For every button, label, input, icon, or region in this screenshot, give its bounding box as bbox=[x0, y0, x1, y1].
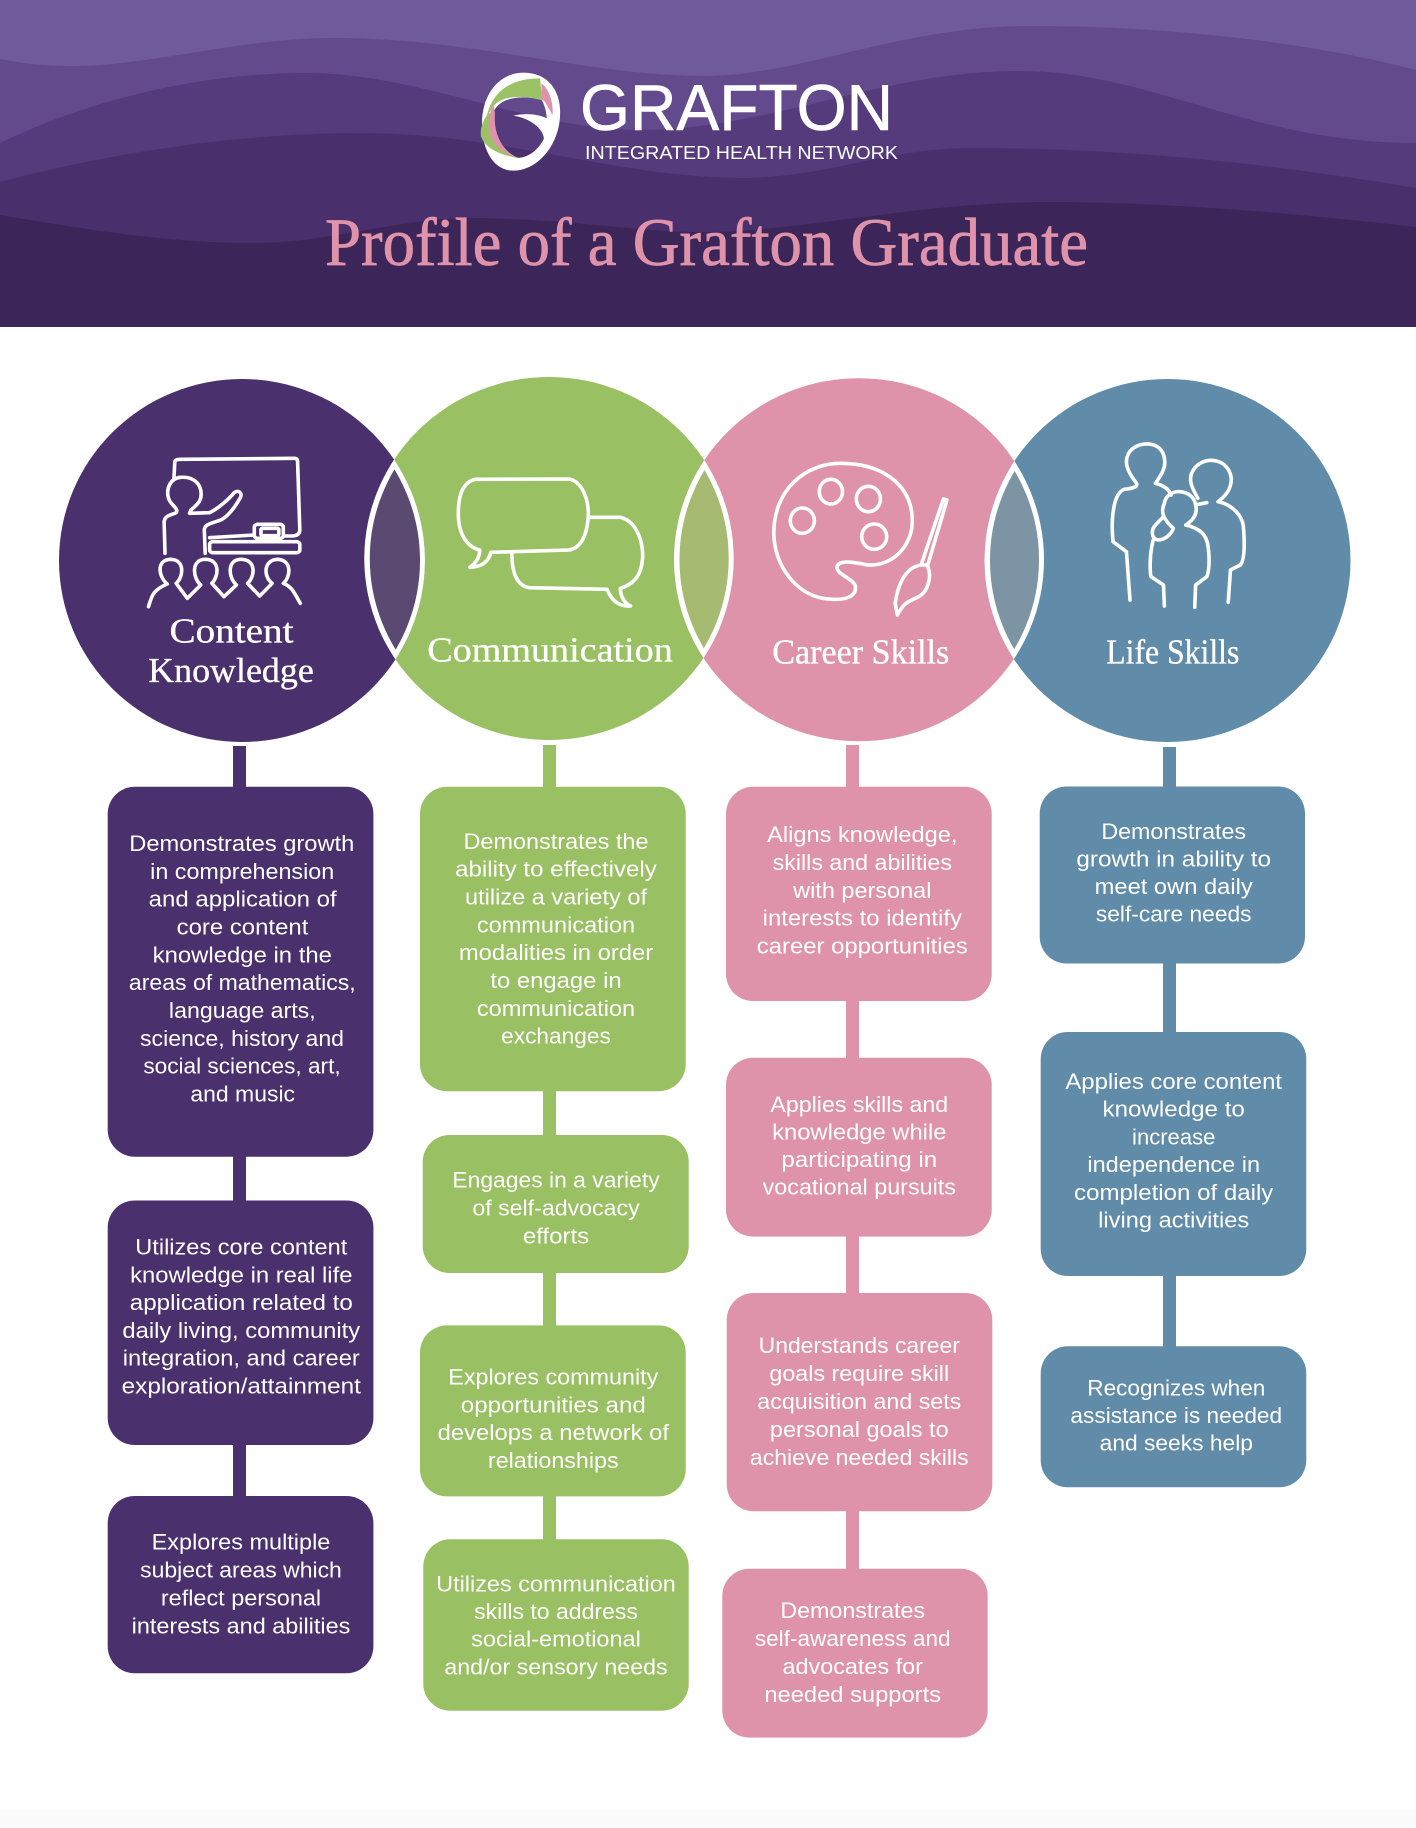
header banner with purple waves bbox=[0, 0, 1416, 327]
card: career goals: goals require skill bbox=[769, 1361, 949, 1386]
card: self-awareness: advocates for bbox=[783, 1654, 923, 1679]
card: daily living independence bbox=[1041, 1032, 1306, 1276]
card: community opportunities bbox=[420, 1325, 686, 1496]
heading: Content Knowledge bbox=[148, 612, 314, 690]
logo tagline: INTEGRATED HEALTH NETWORK bbox=[585, 143, 898, 163]
card: career goals: personal goals to bbox=[770, 1417, 949, 1442]
card: social-emotional needs: and/or sensory needs bbox=[444, 1654, 668, 1679]
card: social-emotional needs: skills to address bbox=[474, 1599, 638, 1624]
card: self-awareness: self-awareness and bbox=[755, 1626, 951, 1651]
card: self-care: Demonstrates bbox=[1101, 819, 1246, 844]
logo: Grafton Integrated Health Network bbox=[481, 71, 898, 171]
card: communication modalities: exchanges bbox=[501, 1024, 611, 1049]
heading: Communication: Communication bbox=[427, 631, 673, 670]
card: social-emotional needs bbox=[423, 1539, 689, 1711]
card: communication modalities: Demonstrates the bbox=[464, 829, 648, 854]
column: Content Knowledge bbox=[108, 746, 373, 1673]
card: growth in comprehension bbox=[108, 787, 373, 1157]
heading: Content Knowledge: Content bbox=[170, 612, 294, 651]
card: communication modalities bbox=[420, 787, 686, 1091]
card: daily living independence: increase bbox=[1132, 1124, 1215, 1149]
overlap lens: knowledge and communication bbox=[364, 460, 425, 660]
card: community opportunities: Explores community bbox=[448, 1365, 659, 1390]
card: growth in comprehension: social sciences, art, bbox=[143, 1054, 341, 1079]
card: seeks help: Recognizes when bbox=[1087, 1376, 1265, 1401]
icon: family bbox=[1112, 444, 1244, 607]
card: community opportunities: opportunities and bbox=[461, 1392, 646, 1417]
card: growth in comprehension: areas of mathematics, bbox=[129, 970, 356, 995]
card: career opportunities: interests to identify bbox=[763, 906, 963, 931]
card: self-advocacy bbox=[423, 1135, 689, 1273]
title: Profile of a Grafton Graduate bbox=[325, 204, 1088, 280]
column: Communication bbox=[420, 745, 689, 1711]
icon: speech bubbles bbox=[458, 479, 643, 606]
card: daily living independence: completion of daily bbox=[1074, 1180, 1274, 1205]
column: Career Skills bbox=[722, 745, 992, 1738]
card: self-care: meet own daily bbox=[1095, 874, 1253, 899]
card: growth in comprehension: and application of bbox=[149, 887, 337, 912]
card: vocational pursuits bbox=[726, 1058, 992, 1237]
icon: Grafton swirl mark bbox=[481, 73, 560, 171]
heading: Life Skills: Life Skills bbox=[1106, 632, 1239, 671]
card: self-advocacy: of self-advocacy bbox=[472, 1195, 640, 1220]
card: real life application: knowledge in real life bbox=[130, 1262, 352, 1287]
card: vocational pursuits: Applies skills and bbox=[770, 1092, 948, 1117]
card: self-awareness: needed supports bbox=[764, 1682, 941, 1707]
overlap lens: career and life bbox=[984, 461, 1044, 659]
card: career opportunities bbox=[726, 787, 992, 1001]
card: self-care: growth in ability to bbox=[1076, 846, 1271, 871]
card: real life application: Utilizes core content bbox=[135, 1235, 348, 1260]
heading: Career Skills: Career Skills bbox=[772, 632, 949, 671]
card: growth in comprehension: in comprehension bbox=[150, 859, 334, 884]
card: self-care: self-care needs bbox=[1096, 902, 1252, 926]
card: seeks help bbox=[1041, 1346, 1306, 1487]
card: self-awareness: Demonstrates bbox=[780, 1598, 925, 1623]
card: communication modalities: communication bbox=[477, 912, 635, 937]
card: real life application: exploration/attainment bbox=[122, 1373, 362, 1398]
card: career goals: Understands career bbox=[759, 1333, 960, 1358]
card: multiple subject areas: reflect personal bbox=[161, 1585, 321, 1610]
icon: teacher at board with students bbox=[148, 458, 300, 607]
card: vocational pursuits: knowledge while bbox=[772, 1119, 946, 1144]
column: Life Skills bbox=[1040, 747, 1306, 1487]
card: multiple subject areas bbox=[108, 1496, 373, 1673]
card: communication modalities: modalities in order bbox=[459, 940, 654, 965]
card: real life application: application related to bbox=[130, 1290, 353, 1315]
card: communication modalities: communication bbox=[477, 996, 635, 1021]
card: communication modalities: to engage in bbox=[490, 968, 622, 993]
card: career opportunities: skills and abilities bbox=[773, 850, 952, 875]
card: growth in comprehension: language arts, bbox=[169, 998, 316, 1023]
card: self-advocacy: efforts bbox=[523, 1223, 589, 1248]
card: multiple subject areas: subject areas which bbox=[140, 1557, 342, 1582]
card: social-emotional needs: Utilizes communication bbox=[436, 1571, 676, 1596]
card: daily living independence: knowledge to bbox=[1103, 1097, 1245, 1122]
card: vocational pursuits: participating in bbox=[781, 1147, 937, 1172]
card: career goals: acquisition and sets bbox=[757, 1389, 961, 1414]
card: community opportunities: develops a network of bbox=[438, 1420, 670, 1445]
card: seeks help: assistance is needed bbox=[1070, 1403, 1282, 1428]
card: vocational pursuits: vocational pursuits bbox=[763, 1174, 956, 1200]
card: self-advocacy: Engages in a variety bbox=[452, 1167, 660, 1192]
circle: Content Knowledge bbox=[59, 379, 425, 742]
card: self-awareness bbox=[722, 1569, 988, 1738]
card: career opportunities: with personal bbox=[792, 878, 931, 903]
card: self-care bbox=[1040, 786, 1305, 964]
card: social-emotional needs: social-emotional bbox=[471, 1627, 641, 1652]
card: multiple subject areas: interests and abilities bbox=[132, 1613, 350, 1638]
card: daily living independence: living activities bbox=[1098, 1208, 1249, 1233]
card: career opportunities: Aligns knowledge, bbox=[767, 822, 957, 847]
card: career opportunities: career opportunities bbox=[757, 934, 968, 958]
card: career goals: achieve needed skills bbox=[750, 1445, 969, 1470]
card: growth in comprehension: and music bbox=[190, 1082, 295, 1107]
card: seeks help: and seeks help bbox=[1100, 1430, 1253, 1455]
heading: Content Knowledge: Knowledge bbox=[148, 651, 314, 690]
card: communication modalities: ability to effectively bbox=[455, 857, 658, 882]
icon: paint palette and brush bbox=[774, 463, 947, 615]
card: real life application bbox=[108, 1200, 373, 1445]
circle: Career Skills bbox=[674, 378, 1044, 741]
card: real life application: integration, and career bbox=[123, 1346, 360, 1371]
card: real life application: daily living, community bbox=[122, 1318, 361, 1343]
circle: Communication bbox=[364, 377, 734, 740]
card: growth in comprehension: science, history and bbox=[140, 1026, 344, 1051]
circle: Life Skills bbox=[984, 379, 1350, 742]
card: growth in comprehension: Demonstrates growth bbox=[129, 831, 354, 856]
card: daily living independence: independence in bbox=[1087, 1152, 1260, 1177]
overlap lens: communication and career bbox=[674, 460, 734, 658]
card: communication modalities: utilize a variety of bbox=[465, 884, 648, 910]
card: growth in comprehension: knowledge in the bbox=[153, 942, 332, 967]
card: growth in comprehension: core content bbox=[177, 914, 309, 940]
card: daily living independence: Applies core content bbox=[1065, 1069, 1283, 1094]
card: career goals bbox=[727, 1293, 992, 1511]
logo wordmark: GRAFTON bbox=[580, 71, 893, 144]
card: community opportunities: relationships bbox=[488, 1448, 619, 1473]
card: multiple subject areas: Explores multiple bbox=[152, 1529, 330, 1554]
